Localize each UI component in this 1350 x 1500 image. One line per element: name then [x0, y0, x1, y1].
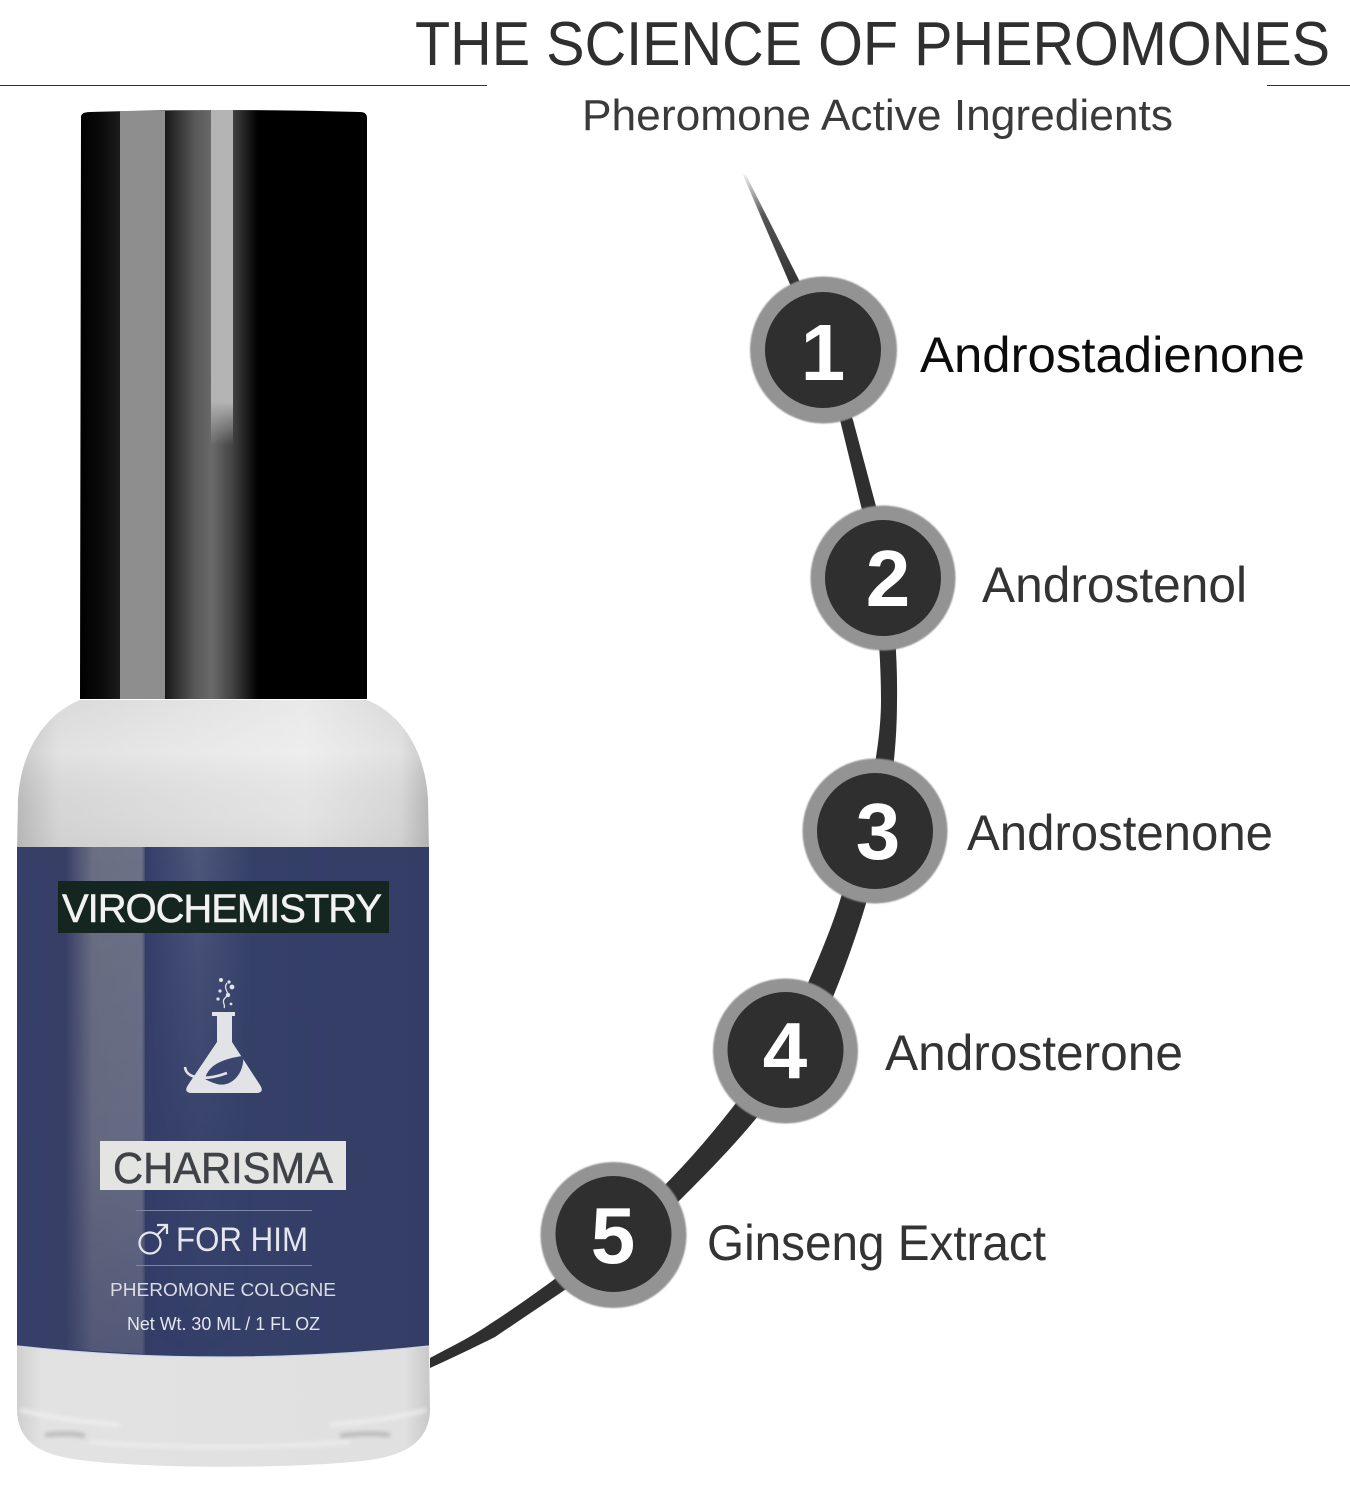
step 1 marker — [750, 276, 897, 424]
bottle label — [17, 847, 429, 1358]
subtitle: Pheromone Active Ingredients — [582, 91, 1173, 140]
step 4 label: Androsterone — [885, 1025, 1183, 1081]
step 1 marker: 1 — [801, 308, 845, 397]
step 4 marker: 4 — [763, 1006, 808, 1095]
step 3 marker — [802, 758, 948, 904]
step 5 label: Ginseng Extract — [707, 1215, 1046, 1271]
product bottle — [17, 110, 430, 1467]
bottle cap — [80, 110, 367, 699]
step 5 marker — [540, 1162, 686, 1308]
step 3 label: Androstenone — [967, 805, 1273, 861]
bottle base — [17, 1345, 430, 1467]
product type: PHEROMONE COLOGNE — [110, 1280, 336, 1300]
step 2 label: Androstenol — [982, 557, 1247, 613]
step 2 marker — [810, 506, 956, 650]
step 4 marker — [713, 978, 858, 1124]
for him: FOR HIM — [176, 1221, 308, 1259]
step 1 label: Androstadienone — [920, 327, 1305, 383]
bottle shoulder — [17, 700, 429, 850]
connecting curve — [430, 175, 897, 1368]
step 2 marker: 2 — [866, 534, 910, 623]
icon: flask with leaf — [185, 978, 262, 1093]
product name: CHARISMA — [113, 1144, 334, 1193]
net weight: Net Wt. 30 ML / 1 FL OZ — [127, 1314, 320, 1334]
step 5 marker: 5 — [591, 1191, 635, 1280]
step 3 marker: 3 — [856, 787, 900, 876]
brand name: VIROCHEMISTRY — [62, 887, 382, 931]
